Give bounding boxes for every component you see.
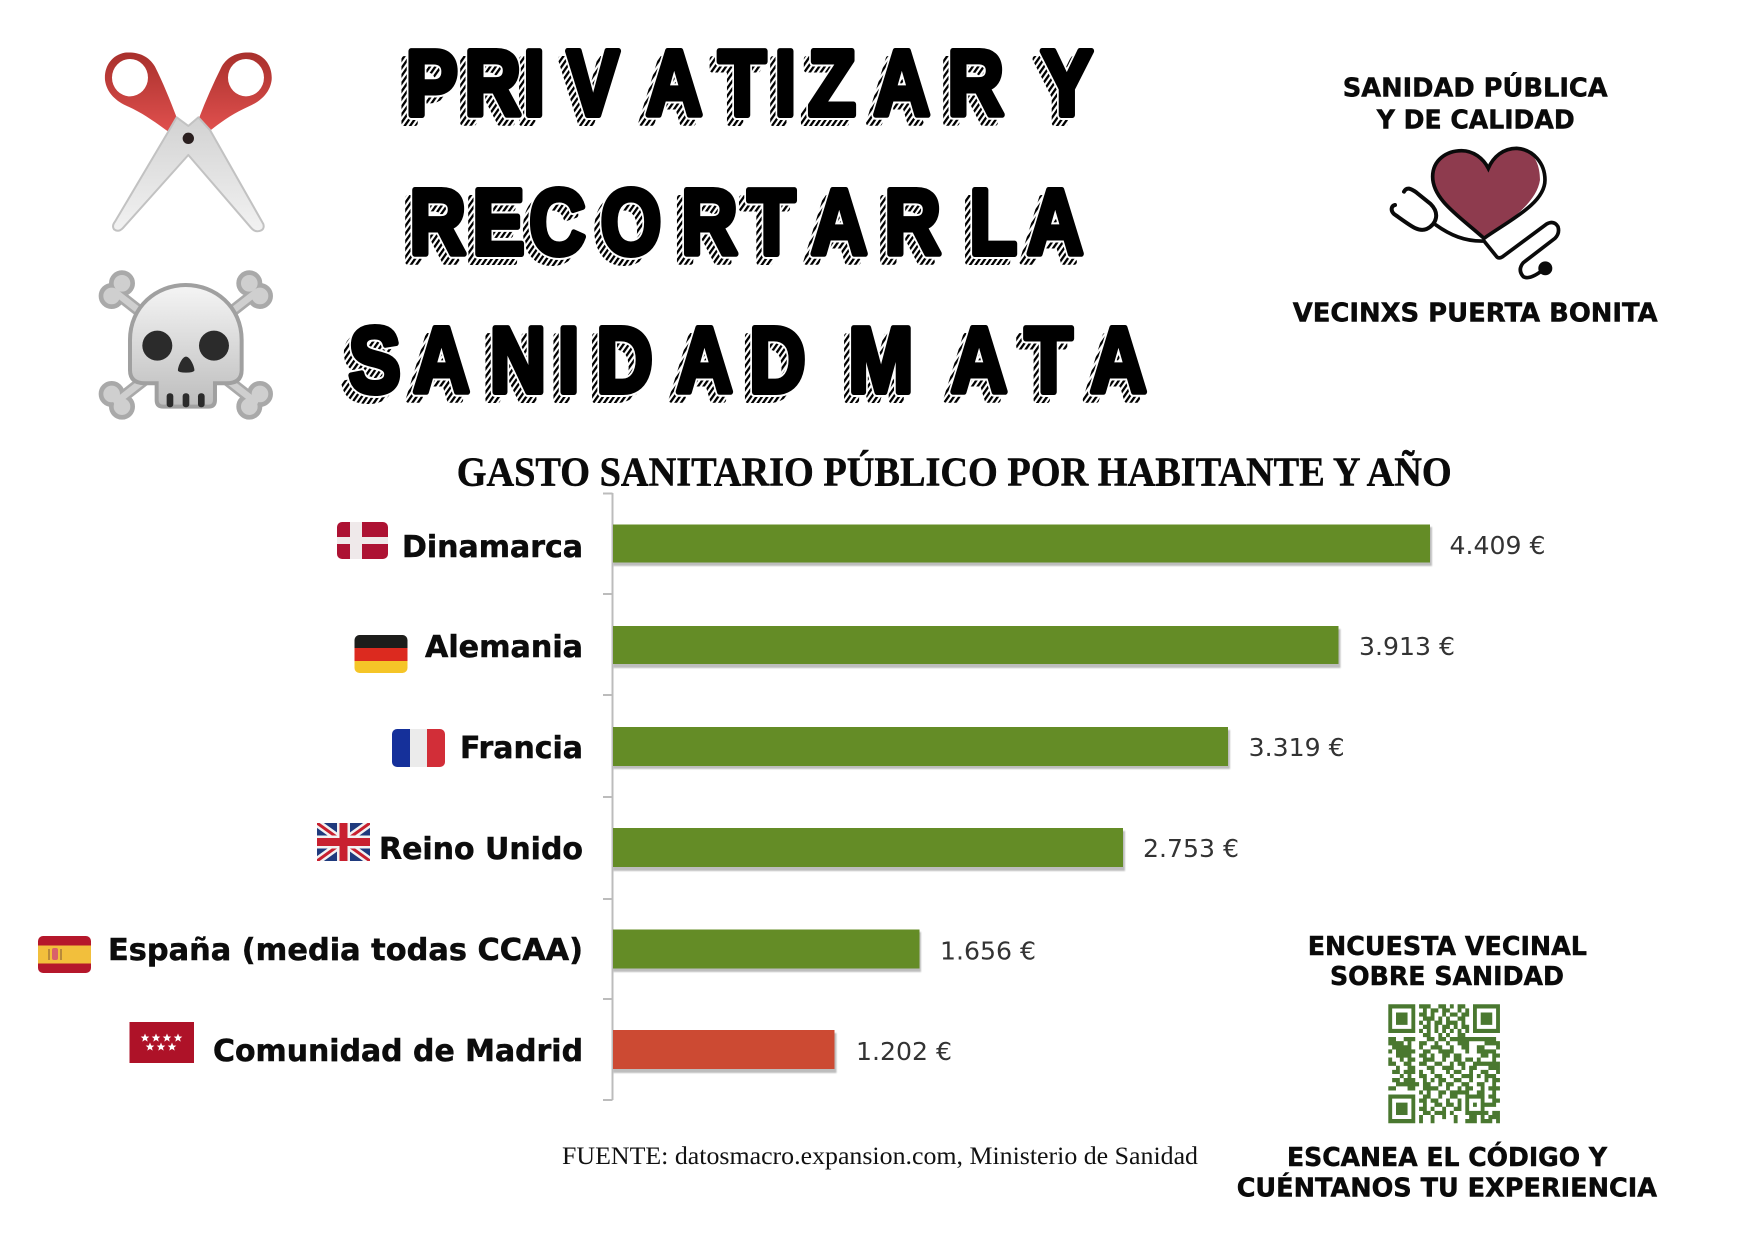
- icon: skull and crossbones: [105, 276, 267, 414]
- flag: Alemania: [354, 635, 408, 673]
- chart title: GASTO SANITARIO PÚBLICO POR HABITANTE Y AÑO: [457, 449, 1452, 495]
- call to action: ESCANEA EL CÓDIGO Y: [1287, 1141, 1608, 1173]
- slogan: sanidad publica: Y DE CALIDAD: [1376, 105, 1575, 135]
- bar: Francia: Francia: [460, 731, 583, 766]
- bar: Alemania: [425, 626, 1455, 668]
- chart axis: [603, 493, 612, 1100]
- title line 2: RECORTAR LA: [409, 171, 1083, 275]
- bar: Alemania: Alemania: [425, 630, 583, 665]
- bar: Comunidad de Madrid: [213, 1030, 952, 1073]
- title line 1: PRIVATIZAR Y: [406, 32, 1093, 136]
- bar: Dinamarca: 4.409 €: [1450, 531, 1546, 560]
- bar: Comunidad de Madrid: Comunidad de Madrid: [213, 1034, 583, 1069]
- bar: Dinamarca: [402, 524, 1546, 566]
- survey heading: SOBRE SANIDAD: [1330, 962, 1564, 992]
- flag: Comunidad de Madrid: [130, 1022, 194, 1063]
- flag: Dinamarca: [337, 522, 388, 559]
- bar: Francia: 3.319 €: [1249, 733, 1345, 762]
- icon: scissors: [105, 52, 272, 231]
- slogan: sanidad publica: [1343, 72, 1608, 135]
- bar: España: [108, 930, 1036, 972]
- organisation name: VECINXS PUERTA BONITA: [1293, 299, 1658, 329]
- title line 1: PRIVATIZAR Y: [399, 40, 1086, 144]
- call to action: [1237, 1141, 1657, 1204]
- bar chart: [38, 493, 1546, 1100]
- flag: Francia: [392, 729, 445, 767]
- title line 2: RECORTAR LA: [409, 171, 1083, 275]
- call to action: CUÉNTANOS TU EXPERIENCIA: [1237, 1172, 1657, 1204]
- title line 3: SANIDAD MATA: [349, 309, 1147, 413]
- title line 3: SANIDAD MATA: [349, 309, 1147, 413]
- title: [342, 32, 1147, 421]
- title line 1: PRIVATIZAR Y: [406, 32, 1093, 136]
- flag: España: [38, 936, 91, 973]
- source note: FUENTE: datosmacro.expansion.com, Ministerio de Sanidad: [562, 1143, 1199, 1170]
- bar: Reino Unido: [379, 828, 1239, 871]
- QR code: [1388, 1006, 1500, 1121]
- title line 2: RECORTAR LA: [403, 179, 1076, 283]
- bar: Reino Unido: Reino Unido: [379, 832, 583, 867]
- bar: Reino Unido: 2.753 €: [1143, 834, 1239, 863]
- bar: Comunidad de Madrid: 1.202 €: [856, 1037, 952, 1066]
- bar: Dinamarca: Dinamarca: [402, 530, 583, 565]
- title line 3: SANIDAD MATA: [342, 317, 1140, 421]
- bar: Alemania: 3.913 €: [1359, 632, 1455, 661]
- survey heading: [1308, 932, 1587, 992]
- flag: Reino Unido: [317, 823, 370, 861]
- bar: España: 1.656 €: [940, 936, 1036, 966]
- survey heading: ENCUESTA VECINAL: [1308, 932, 1587, 962]
- bar: Francia: [460, 727, 1345, 769]
- slogan: sanidad publica: SANIDAD PÚBLICA: [1343, 72, 1608, 104]
- bar: España: España (media todas CCAA): [108, 933, 583, 968]
- icon: heart with stethoscope: [1392, 148, 1559, 278]
